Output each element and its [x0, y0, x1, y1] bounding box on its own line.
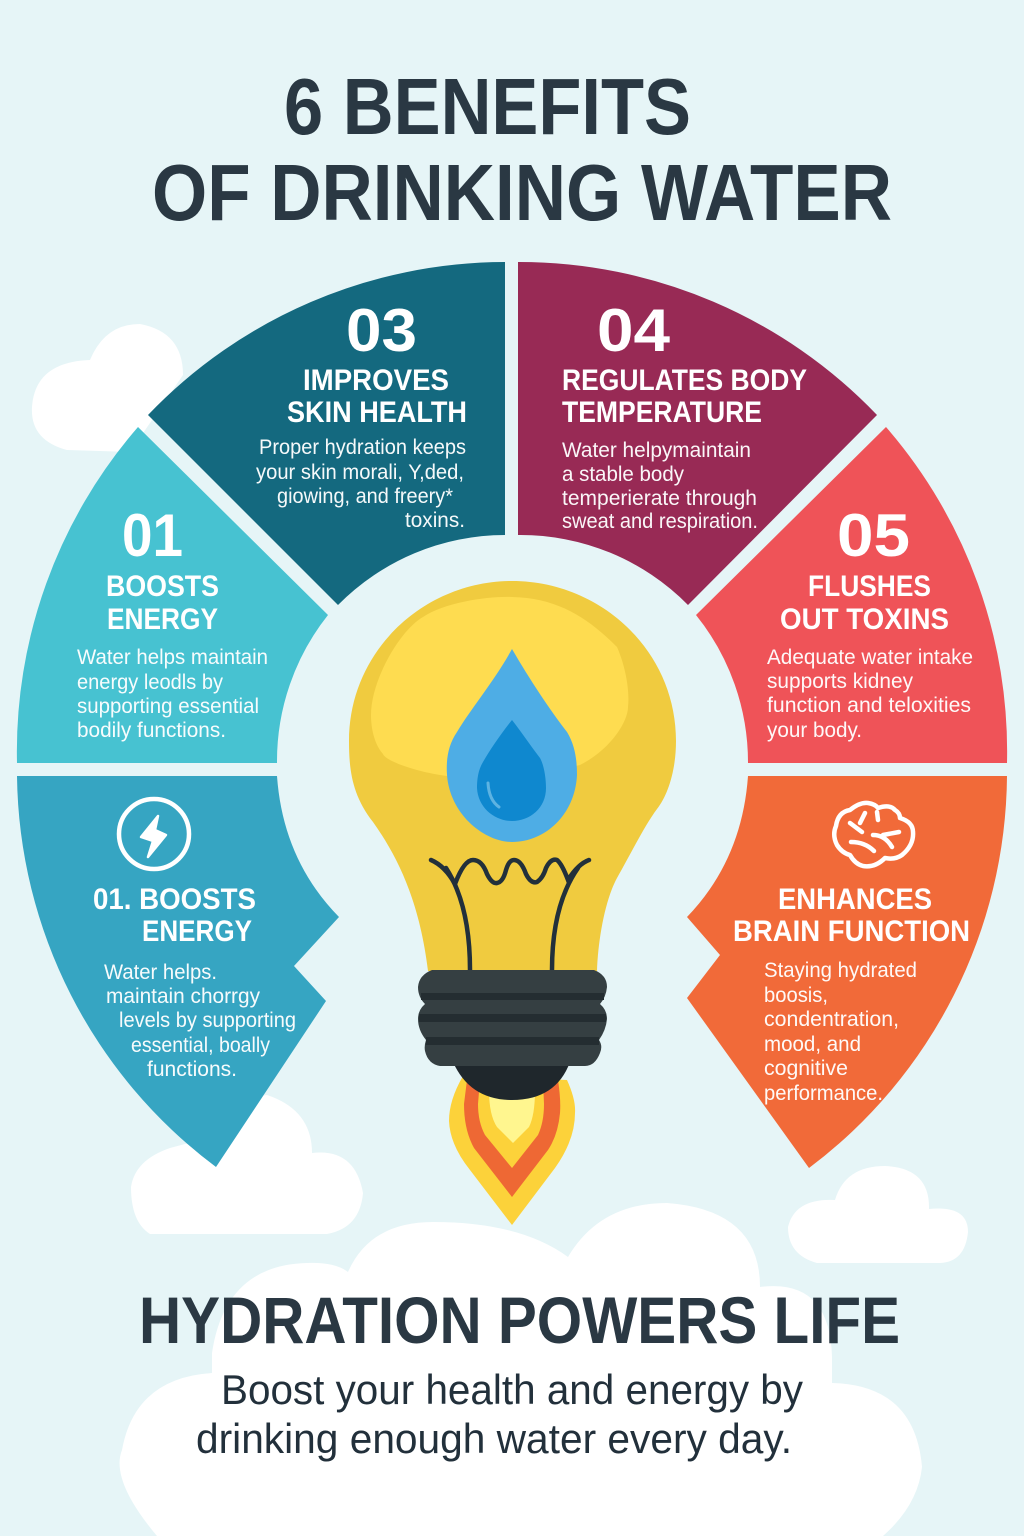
panel: 04 regulates body temperature: 04 — [597, 297, 671, 364]
cloud: lower left — [131, 1095, 363, 1234]
panel: 01 boosts energy: 01 — [122, 502, 183, 569]
panel: boosts energy with icon: 01. BOOSTS — [93, 883, 256, 916]
title — [152, 62, 892, 237]
icon: lightning bolt — [119, 799, 189, 869]
panel: 03 improves skin health: giowing, and freery* — [277, 485, 453, 508]
panel: boosts energy with icon — [17, 776, 339, 1167]
panel: 05 flushes out toxins: Adequate water intake — [767, 646, 973, 669]
panel: enhances brain function: cognitive — [764, 1057, 848, 1080]
icon: brain — [834, 803, 913, 866]
panel: enhances brain function: performance. — [764, 1082, 883, 1105]
panel: enhances brain function: BRAIN FUNCTION — [733, 915, 970, 948]
panel: 03 improves skin health: toxins. — [405, 509, 465, 532]
panel: 04 regulates body temperature: sweat and respiration. — [562, 510, 758, 533]
panel: 03 improves skin health: Proper hydration keeps — [259, 436, 466, 459]
panel: boosts energy with icon: essential, boally — [131, 1034, 270, 1057]
closing message: Boost your health and energy by — [221, 1366, 803, 1413]
panel: 03 improves skin health: SKIN HEALTH — [287, 396, 467, 429]
panel: 05 flushes out toxins: supports kidney — [767, 670, 913, 693]
title: OF DRINKING WATER — [152, 148, 892, 237]
panel: 05 flushes out toxins: your body. — [767, 719, 862, 742]
panel: 01 boosts energy: bodily functions. — [77, 719, 226, 742]
icon: water drop — [447, 649, 577, 842]
title: 6 BENEFITS — [284, 62, 691, 151]
panel: 04 regulates body temperature: TEMPERATURE — [562, 396, 762, 429]
cloud: upper left — [32, 324, 183, 452]
panel: 01 boosts energy: supporting essential — [77, 695, 259, 718]
panel: 01 boosts energy: Water helps maintain — [77, 646, 268, 669]
panel: 03 improves skin health: IMPROVES — [303, 364, 449, 397]
cloud: bottom large — [120, 1203, 922, 1536]
panel: 04 regulates body temperature: a stable body — [562, 463, 684, 486]
panel: enhances brain function: mood, and — [764, 1033, 861, 1056]
bulb screw base — [418, 970, 607, 1100]
panel: 05 flushes out toxins: FLUSHES — [808, 570, 931, 603]
panel: boosts energy with icon: functions. — [147, 1058, 237, 1081]
icon: light bulb — [349, 581, 676, 1100]
panel: 05 flushes out toxins: 05 — [837, 502, 910, 569]
bulb glass — [349, 581, 676, 971]
closing message — [196, 1366, 803, 1462]
panel: 03 improves skin health: 03 — [346, 297, 417, 364]
panel: 01 boosts energy: energy leodls by — [77, 671, 223, 694]
panel: 03 improves skin health: your skin morali, Y,ded, — [256, 461, 464, 484]
panel: 05 flushes out toxins: OUT TOXINS — [780, 603, 949, 636]
panel: boosts energy with icon: Water helps. — [104, 961, 217, 984]
panel: 04 regulates body temperature: temperierate through — [562, 487, 757, 510]
panel: 05 flushes out toxins: function and teloxities — [767, 694, 971, 717]
icon: rocket flame — [449, 1076, 575, 1225]
panel: 01 boosts energy: BOOSTS — [106, 570, 219, 603]
closing message: drinking enough water every day. — [196, 1415, 792, 1462]
panel: boosts energy with icon: maintain chorrgy — [106, 985, 260, 1008]
panel: 04 regulates body temperature — [518, 262, 877, 605]
panel: enhances brain function: boosis, — [764, 984, 828, 1007]
panel: enhances brain function: Staying hydrated — [764, 959, 917, 982]
panel: boosts energy with icon: levels by supporting — [119, 1009, 296, 1032]
panel: 05 flushes out toxins — [696, 427, 1007, 763]
panel: enhances brain function: condentration, — [764, 1008, 899, 1031]
panel: 04 regulates body temperature: Water helpymaintain — [562, 439, 751, 462]
panel: 01 boosts energy: ENERGY — [107, 603, 218, 636]
panel: 01 boosts energy — [17, 427, 328, 763]
cloud: lower right — [788, 1166, 968, 1263]
panel: enhances brain function: ENHANCES — [778, 883, 932, 916]
bulb filament — [431, 860, 589, 970]
panel: boosts energy with icon: ENERGY — [142, 915, 252, 948]
panel: 04 regulates body temperature: REGULATES BODY — [562, 364, 807, 397]
closing headline: HYDRATION POWERS LIFE — [139, 1283, 900, 1357]
bulb highlight — [371, 597, 628, 778]
panel: enhances brain function — [687, 776, 1007, 1168]
panel: 03 improves skin health — [148, 262, 505, 605]
